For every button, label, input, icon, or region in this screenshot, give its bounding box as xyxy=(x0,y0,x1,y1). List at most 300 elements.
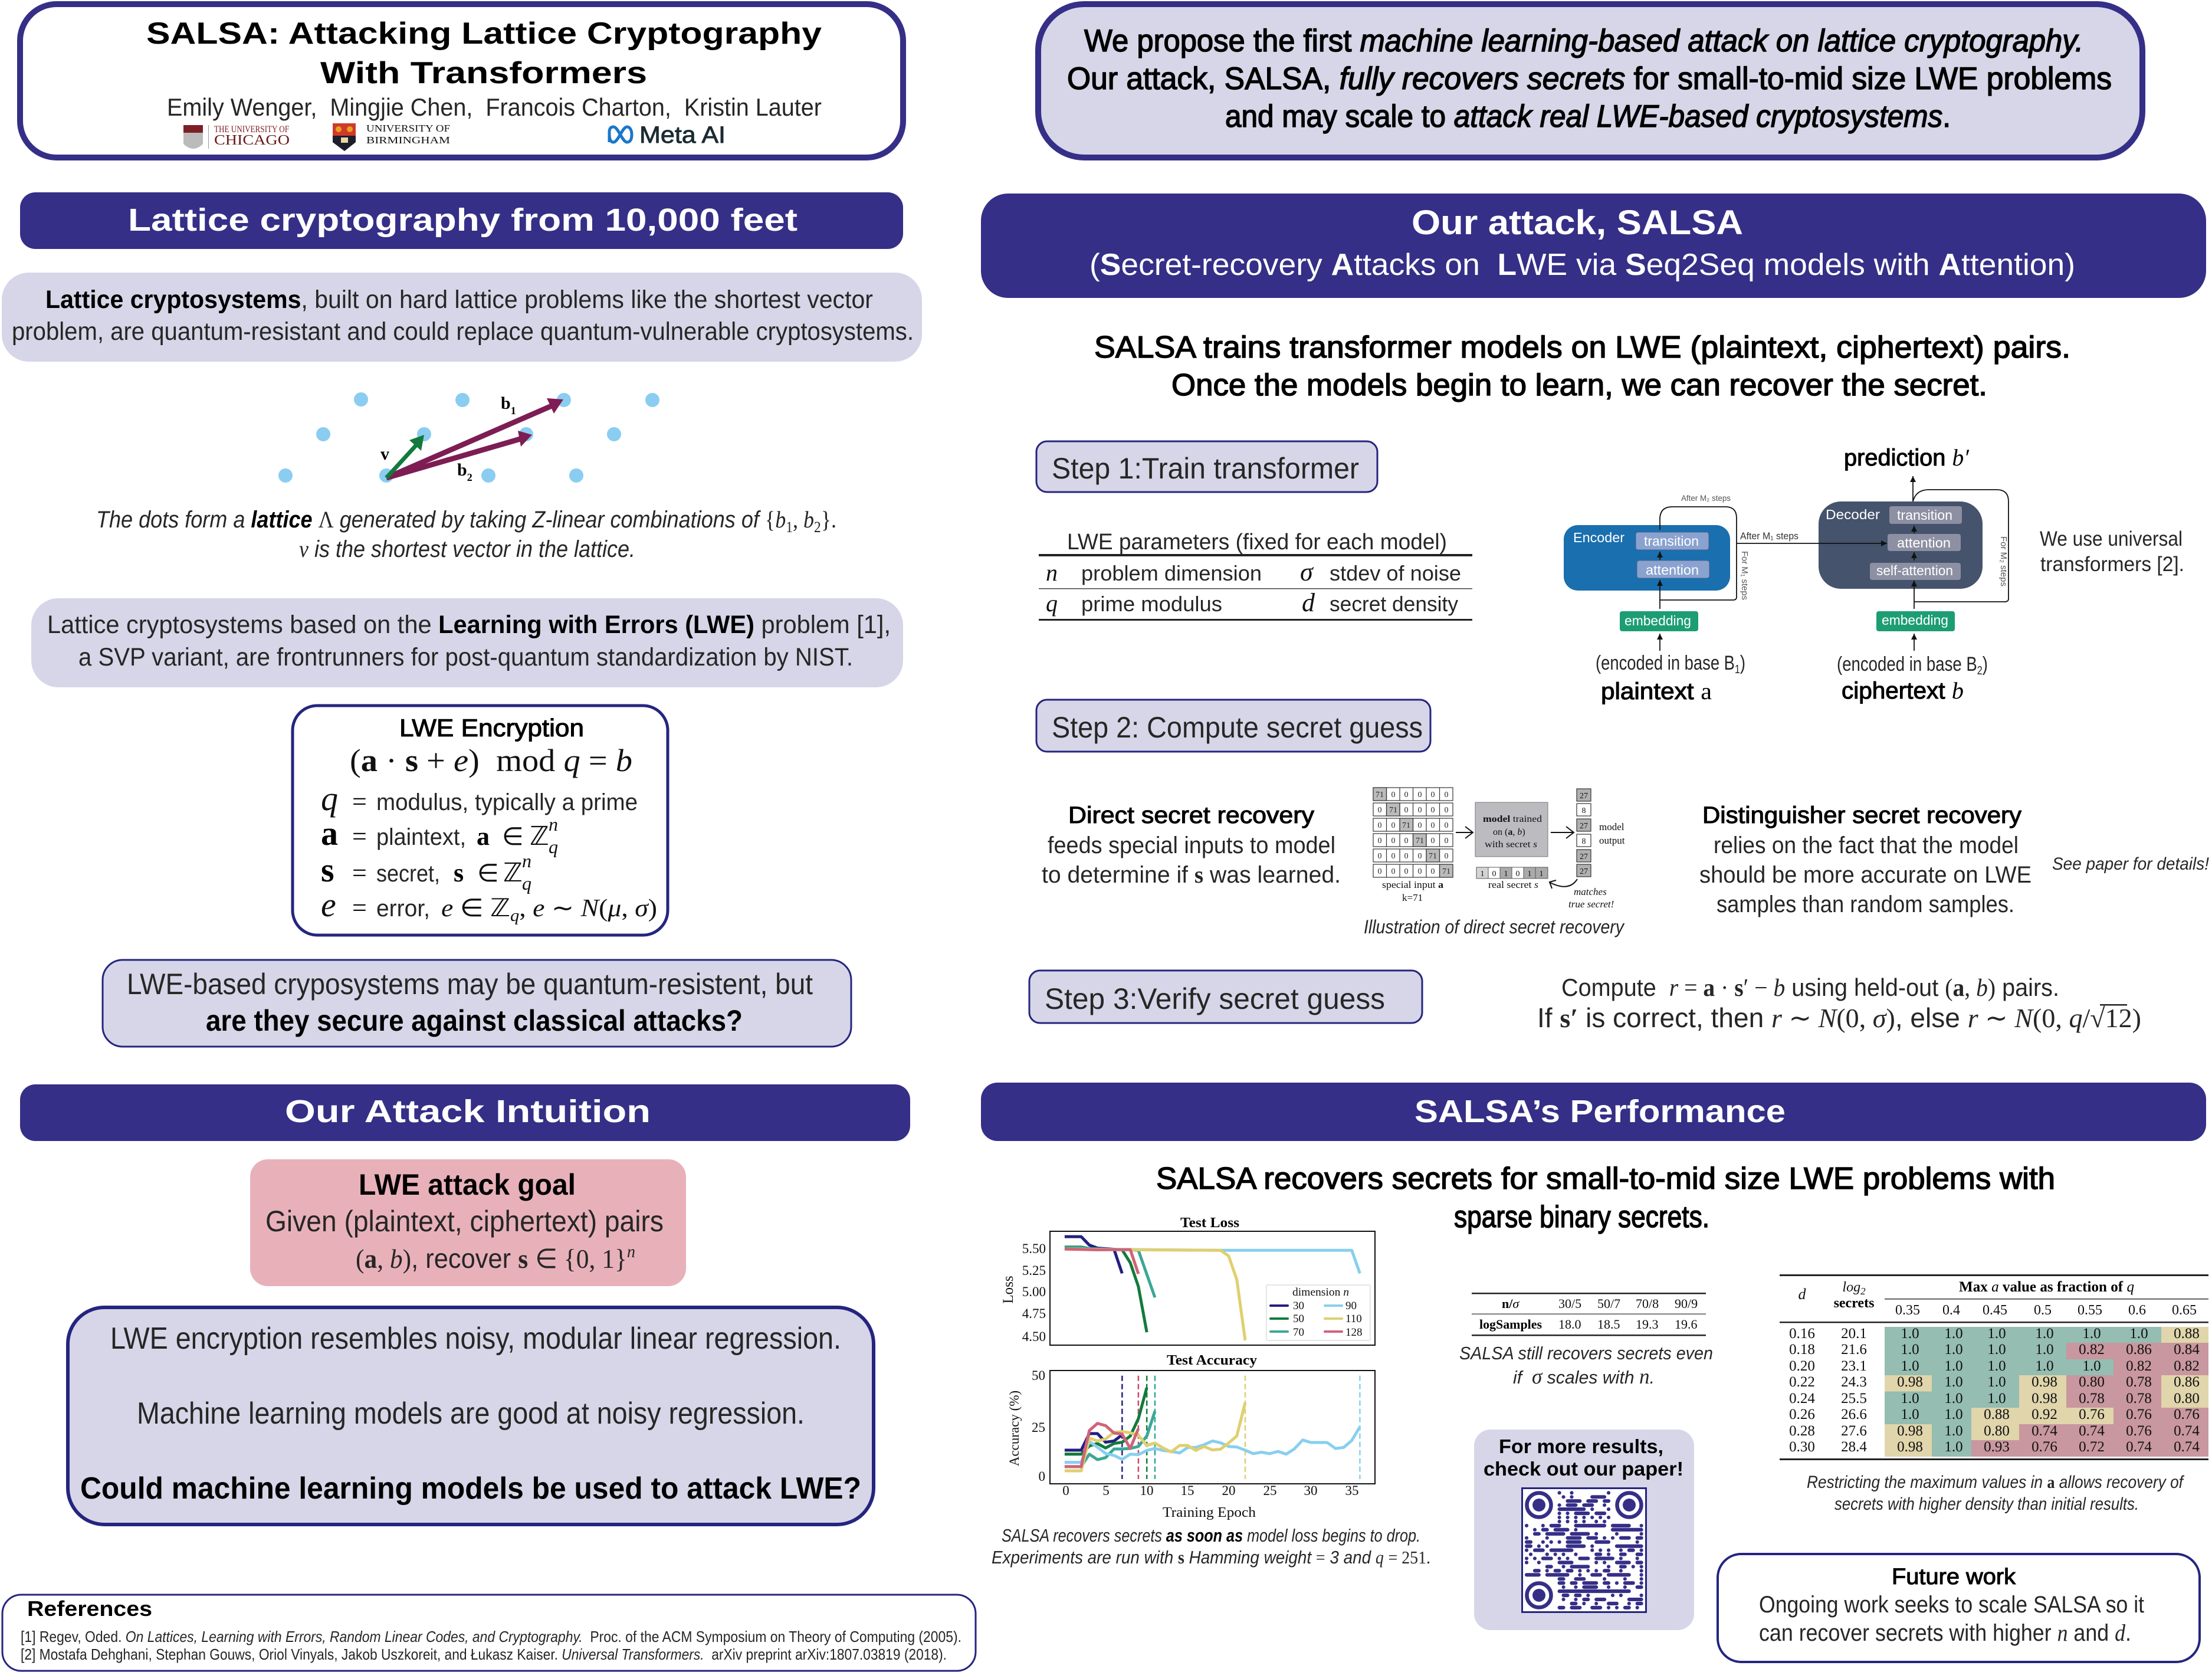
heat table values: 0.98 xyxy=(1897,1374,1923,1390)
embedding blocks: embedding xyxy=(1624,613,1691,628)
heat table: max a value: 0.65 xyxy=(2172,1303,2197,1318)
caption: charts: Experiments are run with s Hamming weight = 3 and q = 251. xyxy=(992,1547,1430,1568)
chart: test accuracy: 0 xyxy=(1038,1469,1045,1484)
heat table values: 0.16 xyxy=(1789,1326,1815,1342)
LWE parameters table: LWE parameters (fixed for each model) xyxy=(1067,530,1447,555)
legend: 70 xyxy=(1293,1326,1304,1339)
decoder: transition xyxy=(1897,507,1952,523)
caption: heat table xyxy=(1807,1473,2184,1514)
chart: test accuracy: 25 xyxy=(1032,1420,1045,1435)
lattice diagram: b xyxy=(457,460,467,480)
caption: charts: SALSA recovers secrets as soon as model loss begins to drop. xyxy=(1002,1525,1420,1546)
illustration: direct secret recovery: 0 xyxy=(1378,821,1381,830)
chart: test loss xyxy=(1000,1215,1375,1345)
illustration: direct secret recovery: 0 xyxy=(1391,791,1396,799)
panel: LWE attack goal xyxy=(250,1159,686,1286)
caption: lattice: b xyxy=(803,506,814,533)
step 2 label xyxy=(1036,700,1430,752)
note: universal transformers: We use universal xyxy=(2040,527,2183,550)
real secret: 1 xyxy=(1504,870,1508,878)
panel: attack intuition: LWE encryption resembles noisy, modular linear regression. xyxy=(110,1322,841,1356)
illustration: direct secret recovery: 0 xyxy=(1431,791,1435,799)
table: log samples: 70/8 xyxy=(1636,1296,1659,1311)
definitions: = xyxy=(352,822,367,851)
model output: model xyxy=(1599,821,1624,832)
illustration: direct secret recovery: 0 xyxy=(1418,867,1422,876)
illustration: direct secret recovery: 71 xyxy=(1429,852,1437,861)
heat table values: 0.26 xyxy=(1789,1407,1815,1422)
section header: Our attack, SALSA: Our attack, SALSA xyxy=(1412,204,1743,242)
embedding blocks xyxy=(1620,611,1955,631)
chart: test accuracy: Training Epoch xyxy=(1163,1505,1256,1520)
panel: main claim: and may scale to attack real LWE-based cryptosystems. xyxy=(1225,99,1951,134)
caption: lattice: }. xyxy=(821,506,836,533)
flow arrows xyxy=(1456,827,1577,889)
heat table values: 0.82 xyxy=(2174,1358,2200,1374)
heat table values: 1.0 xyxy=(2082,1326,2101,1342)
heat table values: 21.6 xyxy=(1841,1342,1867,1358)
chart: test loss: 5.50 xyxy=(1022,1241,1046,1256)
subheading: SALSA trains xyxy=(1094,330,2070,402)
heat table values: 0.24 xyxy=(1789,1391,1815,1407)
panel: attack intuition xyxy=(68,1307,874,1525)
caption: log samples xyxy=(1459,1343,1713,1388)
panel: QR code callout xyxy=(1474,1430,1694,1630)
caption: lattice: , xyxy=(793,506,803,533)
heat table values: 1.0 xyxy=(1901,1342,1919,1358)
heat table values: 0.98 xyxy=(2032,1374,2057,1390)
heat table values: 1.0 xyxy=(2082,1358,2101,1374)
table: log samples: 50/7 xyxy=(1597,1296,1620,1311)
encoder: attention xyxy=(1646,562,1699,578)
heat table: max a value: 0.45 xyxy=(1983,1303,2007,1318)
real secret xyxy=(1476,867,1548,890)
diagram input and output labels: (encoded in base B xyxy=(1837,653,2010,676)
panel: future work: Ongoing work seeks to scale SALSA so it xyxy=(1759,1592,2144,1618)
section header: Our Attack Intuition xyxy=(20,1084,910,1141)
heat table values: 0.78 xyxy=(2126,1374,2152,1390)
heat table values: 0.72 xyxy=(2079,1439,2105,1455)
definitions: modulus, typically a prime xyxy=(376,789,638,815)
chart: test loss: Loss xyxy=(1000,1276,1016,1304)
text: direct secret recovery xyxy=(1042,802,1341,888)
heat table values: 0.98 xyxy=(2032,1391,2057,1407)
real secret: 1 xyxy=(1481,870,1484,878)
reference list: [2] Mostafa Dehghani, Stephan Gouws, Oriol Vinyals, Jakob Uszkoreit, and Łukasz Kaiser. Universal Transformers. arXiv preprint arXiv:1807.03819 (2018). xyxy=(21,1645,947,1663)
heat table values: 0.82 xyxy=(2079,1342,2105,1358)
decoder: Decoder xyxy=(1826,507,1880,522)
logo: University of Birmingham: BIRMINGHAM xyxy=(366,135,450,146)
panel: LWE attack goal: n xyxy=(627,1242,635,1261)
table: log samples: n/σ xyxy=(1502,1296,1519,1311)
logo: University of Chicago: CHICAGO xyxy=(214,133,290,148)
embedding blocks: embedding xyxy=(1882,612,1948,628)
heat table values: 28.4 xyxy=(1841,1439,1867,1455)
text: direct secret recovery: Direct secret recovery xyxy=(1068,802,1314,828)
heat table values: 1.0 xyxy=(1944,1423,1963,1439)
heat table values: 1.0 xyxy=(1987,1342,2006,1358)
real secret: 0 xyxy=(1492,870,1496,878)
real secret: real secret s xyxy=(1488,879,1538,890)
text: distinguisher secret recovery: Distinguisher secret recovery xyxy=(1702,802,2021,828)
LWE parameters table: problem dimension xyxy=(1081,561,1262,585)
chart: test accuracy: 35 xyxy=(1345,1483,1359,1498)
arrow labels: After M₁ steps xyxy=(1740,530,1799,542)
definitions: a xyxy=(321,814,338,853)
decoder: self-attention xyxy=(1876,563,1953,578)
real secret: 1 xyxy=(1528,870,1531,878)
illustration: direct secret recovery: 0 xyxy=(1378,867,1381,876)
LWE parameters table: d xyxy=(1302,588,1315,617)
illustration: direct secret recovery xyxy=(1373,788,1625,910)
heat table values: 0.78 xyxy=(2079,1391,2105,1407)
heat table values: 0.93 xyxy=(1984,1439,2010,1455)
legend: 90 xyxy=(1345,1300,1357,1312)
grid labels: true secret! xyxy=(1568,899,1614,910)
text: verification formula: Compute r = a · s′ − b using held-out (a, b) pairs. xyxy=(1561,973,2059,1002)
definitions: e ∈ ℤ xyxy=(441,895,506,922)
model box: on (a, b) xyxy=(1493,827,1525,837)
heat table values: 27.6 xyxy=(1841,1423,1867,1439)
definitions: e ∼ N(μ, σ) xyxy=(533,895,657,922)
illustration: direct secret recovery: 71 xyxy=(1442,867,1450,876)
panel: future work: Future work xyxy=(1892,1565,2016,1589)
section header: SALSA's Performance xyxy=(981,1083,2206,1141)
chart: test accuracy xyxy=(1007,1353,1375,1520)
heat table values: 1.0 xyxy=(2035,1358,2054,1374)
caption: charts xyxy=(992,1525,1430,1568)
heat table values: 0.78 xyxy=(2126,1391,2152,1407)
heat table values: 0.80 xyxy=(2079,1374,2105,1390)
heat table: max a value: 0.4 xyxy=(1942,1303,1960,1318)
title: SALSA: Attacking Lattice Cryptography xyxy=(146,17,822,51)
heat table values: 1.0 xyxy=(1944,1374,1963,1390)
real secret: 1 xyxy=(1540,870,1543,878)
heat table values: 0.88 xyxy=(2174,1326,2200,1342)
chart: test loss: Test Loss xyxy=(1180,1215,1239,1231)
panel: classical attacks question: are they secure against classical attacks? xyxy=(206,1004,743,1037)
heat table values: 1.0 xyxy=(1987,1374,2006,1390)
table: log samples: 18.5 xyxy=(1597,1317,1620,1332)
special input grid xyxy=(1373,788,1453,877)
heat table values: 1.0 xyxy=(1944,1391,1963,1407)
illustration: direct secret recovery: 0 xyxy=(1444,821,1449,830)
heat table values: 24.3 xyxy=(1841,1374,1867,1390)
heat table values: 0.74 xyxy=(2079,1423,2105,1439)
title xyxy=(146,17,822,90)
logo: University of Birmingham: UNIVERSITY OF xyxy=(366,123,450,134)
heat table values: 0.76 xyxy=(2079,1407,2105,1422)
heat table values: 0.84 xyxy=(2174,1342,2200,1358)
encoder xyxy=(1564,525,1730,591)
illustration: direct secret recovery: 0 xyxy=(1418,791,1422,799)
illustration: direct secret recovery: 0 xyxy=(1378,852,1381,861)
lattice diagram: 2 xyxy=(467,471,472,483)
caption: log samples: if σ scales with n. xyxy=(1513,1365,1655,1388)
logo: Meta AI: Meta AI xyxy=(639,122,726,148)
definitions: = xyxy=(352,787,367,816)
illustration: direct secret recovery: 0 xyxy=(1404,806,1409,815)
legend: dimension n xyxy=(1292,1286,1349,1299)
panel: lattice cryptosystems: Lattice cryptosystems, built on hard lattice problems like the shortest vector xyxy=(45,286,873,314)
LWE parameters table: prime modulus xyxy=(1081,592,1222,616)
definitions: a xyxy=(477,822,490,851)
caption: heat table: secrets with higher density than initial results. xyxy=(1834,1494,2139,1514)
heat table values: 25.5 xyxy=(1841,1391,1867,1407)
panel: references xyxy=(2,1595,976,1671)
heat table values: 0.86 xyxy=(2174,1374,2200,1390)
panel: main claim xyxy=(1038,4,2142,158)
heat table values: 1.0 xyxy=(1901,1326,1919,1342)
heat table values: 26.6 xyxy=(1841,1407,1867,1422)
diagram input and output labels: prediction b′ xyxy=(1844,444,1970,471)
model output: 27 xyxy=(1580,867,1588,876)
chart: test loss: 5.00 xyxy=(1022,1284,1046,1299)
illustration: direct secret recovery: 71 xyxy=(1376,791,1384,799)
title panel xyxy=(20,4,903,158)
lattice diagram: 1 xyxy=(511,405,516,417)
text: distinguisher secret recovery: should be more accurate on LWE xyxy=(1699,862,2032,888)
heat table values: 0.76 xyxy=(2032,1439,2057,1455)
definitions: = xyxy=(352,893,367,922)
heat table values: 0.80 xyxy=(2174,1391,2200,1407)
model box: model trained xyxy=(1483,814,1542,824)
LWE parameters table xyxy=(1039,530,1472,621)
text: direct secret recovery: feeds special inputs to model xyxy=(1048,832,1335,858)
authors: Emily Wenger, Mingjie Chen, Francois Charton, Kristin Lauter xyxy=(167,93,822,121)
panel: main claim: Our attack, SALSA, fully recovers secrets for small-to-mid size LWE problems xyxy=(1067,61,2112,96)
illustration: direct secret recovery: 0 xyxy=(1404,867,1409,876)
heat table values: 0.98 xyxy=(1897,1423,1923,1439)
definitions: q xyxy=(510,907,519,925)
caption: heat table: Restricting the maximum values in a allows recovery of xyxy=(1807,1473,2184,1492)
illustration: direct secret recovery: 0 xyxy=(1391,821,1396,830)
model output: output xyxy=(1599,835,1625,846)
illustration: direct secret recovery: 0 xyxy=(1391,852,1396,861)
definitions: ∈ xyxy=(477,860,499,887)
panel: attack intuition: Could machine learning models be used to attack LWE? xyxy=(80,1471,861,1506)
definitions: ℤ xyxy=(530,822,549,851)
heading: References xyxy=(27,1596,152,1621)
definitions: plaintext, xyxy=(376,824,466,850)
step 2 label: Step 2: Compute secret guess xyxy=(1052,711,1423,744)
illustration: direct secret recovery: 0 xyxy=(1444,852,1449,861)
caption: lattice: 1 xyxy=(786,519,793,536)
text: direct secret recovery: to determine if s was learned. xyxy=(1042,861,1341,888)
heat table values: 1.0 xyxy=(2129,1326,2148,1342)
model output xyxy=(1577,789,1625,877)
heat table values: 0.76 xyxy=(2126,1423,2152,1439)
panel: LWE attack goal: Given (plaintext, ciphertext) pairs xyxy=(265,1205,664,1238)
panel: lattice cryptosystems: problem, are quantum-resistant and could replace quantum-vulnerable cryptosystems. xyxy=(12,317,914,346)
arrow labels: After M₂ steps xyxy=(1681,493,1731,503)
lattice diagram xyxy=(278,392,659,483)
heat table: max a value: 0.6 xyxy=(2128,1303,2146,1318)
heat table values: 20.1 xyxy=(1841,1326,1867,1342)
chart: test accuracy: 15 xyxy=(1181,1483,1194,1498)
chart: test accuracy: Accuracy (%) xyxy=(1007,1391,1022,1466)
definitions: ∈ xyxy=(502,824,524,851)
illustration: direct secret recovery: 0 xyxy=(1404,791,1409,799)
caption: lattice: v is the shortest vector in the lattice. xyxy=(299,536,635,562)
heat table: max a value: 0.5 xyxy=(2034,1303,2052,1318)
definitions: ℤ xyxy=(503,858,523,887)
chart: test accuracy: 30 xyxy=(1304,1483,1318,1498)
definitions: e xyxy=(321,886,336,924)
illustration: direct secret recovery: 0 xyxy=(1378,837,1381,845)
formula: (a · s + e) mod q = b xyxy=(350,743,632,778)
heat table: max a value: log xyxy=(1842,1280,1860,1295)
illustration: direct secret recovery: 71 xyxy=(1416,837,1424,845)
reference list xyxy=(21,1628,961,1663)
LWE parameters table: secret density xyxy=(1330,592,1458,616)
definitions: s xyxy=(321,851,334,889)
arrow labels xyxy=(1681,493,2008,600)
chart: test loss: 4.75 xyxy=(1022,1306,1046,1321)
panel: QR code callout: check out our paper! xyxy=(1484,1458,1683,1480)
text: verification formula xyxy=(1537,973,2141,1033)
caption: log samples: SALSA still recovers secrets even xyxy=(1459,1343,1713,1363)
heat table values: 0.74 xyxy=(2174,1423,2200,1439)
decoder xyxy=(1819,501,1983,589)
heat table values: 0.74 xyxy=(2174,1439,2200,1455)
heading: LWE Encryption xyxy=(399,714,584,742)
LWE parameters table: n xyxy=(1046,559,1058,586)
subheading: performance: sparse binary secrets. xyxy=(1454,1200,1709,1234)
grid labels: matches xyxy=(1574,886,1607,897)
illustration: direct secret recovery: 0 xyxy=(1378,806,1381,815)
note: universal transformers: transformers [2]. xyxy=(2040,553,2184,576)
model output: 27 xyxy=(1580,822,1588,831)
definitions: error, xyxy=(376,896,430,922)
illustration: direct secret recovery: 71 xyxy=(1402,821,1410,830)
heat table values: 1.0 xyxy=(1987,1391,2006,1407)
heat table values: 0.74 xyxy=(2032,1423,2057,1439)
illustration: direct secret recovery: 0 xyxy=(1444,837,1449,845)
illustration: direct secret recovery: 0 xyxy=(1391,837,1396,845)
definitions: n xyxy=(522,850,531,871)
illustration: direct secret recovery: 0 xyxy=(1431,867,1435,876)
LWE parameters table: σ xyxy=(1300,558,1314,586)
LWE parameters table: q xyxy=(1046,590,1058,617)
heat table values: 0.22 xyxy=(1789,1374,1815,1390)
section header: SALSA's Performance: SALSA’s Performance xyxy=(1415,1094,1786,1129)
heat table values: 0.86 xyxy=(2126,1342,2152,1358)
legend: 110 xyxy=(1345,1313,1362,1325)
panel: future work: can recover secrets with higher n and d. xyxy=(1759,1619,2131,1646)
text: distinguisher secret recovery: samples than random samples. xyxy=(1717,891,2014,917)
heat table values: 0.20 xyxy=(1789,1358,1815,1374)
reference list: [1] Regev, Oded. On Lattices, Learning with Errors, Random Linear Codes, and Cryptography. Proc. of the ACM Symposium on Theory of Computing (2005). xyxy=(21,1628,961,1645)
diagram input and output labels: plaintext a xyxy=(1601,678,1712,704)
table: log samples: logSamples xyxy=(1479,1317,1542,1332)
definitions: q xyxy=(549,836,558,857)
illustration: direct secret recovery: 0 xyxy=(1418,806,1422,815)
heat table values: 1.0 xyxy=(1901,1391,1919,1407)
grid labels: special input a xyxy=(1382,879,1444,890)
illustration: direct secret recovery: 0 xyxy=(1431,837,1435,845)
arrow labels: For M₁ steps xyxy=(1740,551,1750,600)
real secret: 0 xyxy=(1516,870,1519,878)
step 1 label: Step 1:Train transformer xyxy=(1052,452,1359,485)
heat cells xyxy=(1885,1327,2208,1457)
chart: test accuracy: 20 xyxy=(1222,1483,1235,1498)
heat table values: 0.76 xyxy=(2126,1407,2152,1422)
heat table values: 0.74 xyxy=(2126,1439,2152,1455)
panel: LWE cryptosystems: a SVP variant, are frontrunners for post-quantum standardization by NIST. xyxy=(78,643,853,671)
definitions: q xyxy=(522,873,531,894)
panel: classical attacks question xyxy=(103,960,851,1047)
icon: QR code xyxy=(1522,1488,1646,1612)
heat table values: 1.0 xyxy=(2035,1342,2054,1358)
logo: University of Chicago: THE UNIVERSITY OF xyxy=(214,124,289,135)
heat table values: 0.98 xyxy=(1897,1439,1923,1455)
panel: QR code callout: For more results, xyxy=(1499,1435,1663,1457)
chart: test accuracy: 25 xyxy=(1263,1483,1276,1498)
lattice diagram: v xyxy=(380,444,389,464)
table: log samples: 19.3 xyxy=(1636,1317,1659,1332)
table: log samples: 90/9 xyxy=(1675,1296,1698,1311)
logo: University of Chicago xyxy=(183,124,290,149)
heat table values: 0.80 xyxy=(1984,1423,2010,1439)
definitions: n xyxy=(549,814,558,835)
definitions: q xyxy=(321,779,338,818)
heat table values: 1.0 xyxy=(1944,1439,1963,1455)
chart: test accuracy: 10 xyxy=(1140,1483,1154,1498)
diagram input and output labels: ciphertext b xyxy=(1842,677,1964,704)
chart: test accuracy: 50 xyxy=(1032,1368,1045,1383)
decoder: attention xyxy=(1897,535,1951,550)
heat table values: 1.0 xyxy=(1944,1358,1963,1374)
subheading: SALSA trains: SALSA trains transformer models on LWE (plaintext, ciphertext) pairs. xyxy=(1094,330,2070,365)
illustration: direct secret recovery: 0 xyxy=(1404,837,1409,845)
legend: 50 xyxy=(1293,1313,1304,1325)
arrows xyxy=(1660,476,2008,651)
heat table values: 1.0 xyxy=(1987,1326,2006,1342)
encoder: transition xyxy=(1644,533,1699,549)
table: log samples: 18.0 xyxy=(1558,1317,1581,1332)
model output: 8 xyxy=(1582,807,1586,815)
heat table: max a value: Max a value as fraction of q xyxy=(1959,1279,2134,1295)
heat table values: 0.30 xyxy=(1789,1439,1815,1455)
heat table values: 23.1 xyxy=(1841,1358,1867,1374)
panel: lattice cryptosystems xyxy=(2,273,922,362)
illustration: direct secret recovery: 0 xyxy=(1418,821,1422,830)
panel: main claim: We propose the first machine learning-based attack on lattice cryptography. xyxy=(1084,24,2083,58)
caption: lattice: The dots form a lattice Λ generated by taking Z-linear combinations of {b xyxy=(96,506,806,533)
heat table values: 1.0 xyxy=(1944,1342,1963,1358)
chart: test loss: 4.50 xyxy=(1022,1329,1046,1344)
panel: LWE cryptosystems xyxy=(31,598,903,687)
subheading: SALSA trains: Once the models begin to learn, we can recover the secret. xyxy=(1171,368,1987,402)
step 1 label xyxy=(1036,441,1377,492)
encoder: Encoder xyxy=(1573,530,1624,545)
chart: test loss: 5.25 xyxy=(1022,1263,1046,1278)
heat table: max a value: 0.35 xyxy=(1895,1303,1920,1318)
legend: 30 xyxy=(1293,1300,1304,1312)
title: With Transformers xyxy=(320,56,647,90)
section header: Our attack, SALSA xyxy=(981,194,2206,298)
heat table values: 1.0 xyxy=(1987,1358,2006,1374)
illustration: direct secret recovery: 0 xyxy=(1431,806,1435,815)
heat table values: 0.82 xyxy=(2126,1358,2152,1374)
arrow labels: For M₂ steps xyxy=(1998,536,2008,586)
subheading: performance: SALSA recovers secrets for small-to-mid size LWE problems with xyxy=(1156,1162,2055,1196)
heat table values xyxy=(1789,1326,2200,1455)
definitions: = xyxy=(352,858,367,887)
model box xyxy=(1475,802,1548,857)
definitions xyxy=(321,779,657,925)
